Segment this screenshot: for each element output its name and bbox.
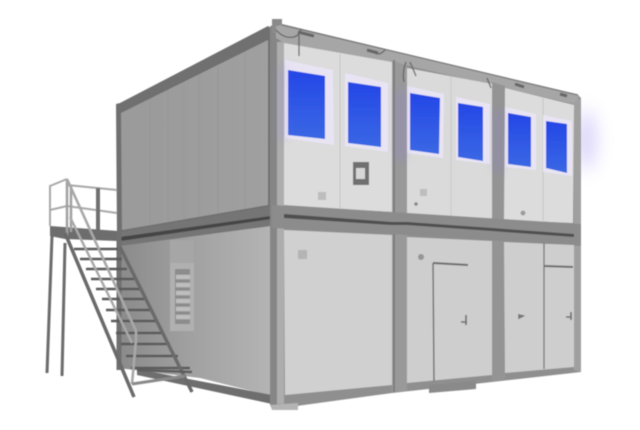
window 4: [458, 103, 483, 161]
window 1: [288, 70, 325, 139]
side wall: upper container: [116, 26, 276, 238]
upper panel 3: [504, 88, 574, 223]
window 6: [546, 121, 567, 173]
cables and roof fittings: [276, 29, 567, 96]
upper panel 1: [284, 43, 392, 212]
window frames: [285, 60, 572, 176]
support post: [116, 231, 122, 370]
corner cap: [272, 19, 282, 33]
door: middle module: [433, 263, 468, 381]
vents and details: [298, 162, 525, 260]
platform legs: [47, 236, 65, 376]
treads: [74, 249, 190, 368]
front frame: [270, 24, 581, 408]
window 5: [508, 113, 531, 167]
lower panel 2: [407, 237, 492, 383]
post 4: [574, 98, 581, 372]
mid beam: front: [272, 205, 581, 246]
glow: window edges: [280, 66, 501, 172]
rail edge: [282, 25, 578, 95]
post 2: [392, 60, 407, 393]
side wall: lower container: [118, 222, 272, 404]
window 2: [348, 82, 381, 147]
window 3: [410, 93, 440, 154]
upper panel 2: [407, 68, 492, 221]
stringers: [65, 233, 134, 397]
door: right module: [519, 243, 573, 369]
post 3: [492, 82, 505, 382]
side wall: mid beam: [118, 206, 271, 246]
lower panel 1: [284, 230, 392, 395]
guard rails: [50, 179, 117, 226]
glow: right edge: [577, 110, 595, 170]
lower panel 3: [504, 242, 574, 373]
corner post: [270, 26, 284, 405]
base block: [429, 381, 476, 393]
platform: [50, 226, 118, 241]
top rail: [276, 25, 578, 105]
handrail: [67, 179, 136, 384]
staircase: [47, 179, 192, 397]
